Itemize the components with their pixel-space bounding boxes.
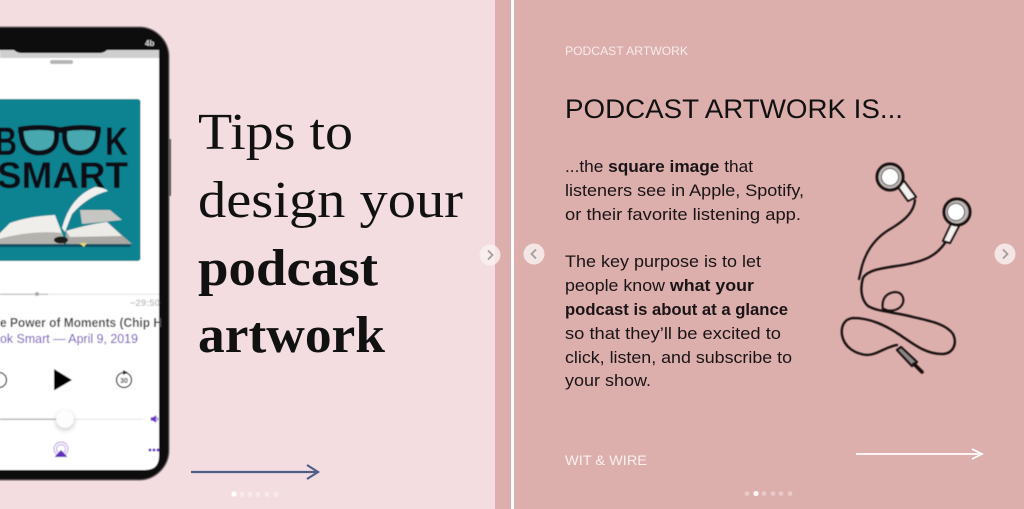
earphone left wire xyxy=(859,200,915,279)
remaining time: −29:50 xyxy=(130,298,160,309)
progress bar xyxy=(0,292,159,296)
cover glasses xyxy=(18,127,101,153)
heading: tips to design your podcast artwork xyxy=(198,104,463,364)
heading: tips to design your podcast artwork: artwork xyxy=(198,307,385,364)
body text: podcast is about at a glance xyxy=(565,301,788,319)
body text: or their favorite listening app. xyxy=(565,206,801,224)
nav button: previous right slide xyxy=(524,244,544,264)
episode subtitle: ok Smart — April 9, 2019 xyxy=(0,331,138,346)
icon: speaker xyxy=(151,416,158,422)
screen top grey bar xyxy=(0,50,159,58)
heading: tips to design your podcast artwork: Tips to xyxy=(198,104,353,161)
cover background xyxy=(0,99,140,261)
heading: tips to design your podcast artwork: podcast xyxy=(198,240,379,297)
body text: click, listen, and subscribe to xyxy=(565,349,792,367)
audio jack xyxy=(897,347,922,372)
panel: left slide xyxy=(0,0,495,509)
cover open book xyxy=(0,187,132,247)
icon: more dots xyxy=(148,448,160,452)
earphone main wire xyxy=(842,243,955,355)
eyebrow label: PODCAST ARTWORK xyxy=(565,44,688,58)
phone mockup xyxy=(0,27,171,480)
icon: skip forward 30: 30 xyxy=(120,378,128,385)
panel: right slide xyxy=(514,0,1024,509)
icon: airplay xyxy=(54,442,68,457)
body text: people know what your xyxy=(565,277,755,295)
phone notch xyxy=(11,45,110,53)
cover word BOOK xyxy=(0,120,128,164)
arrow: right slide xyxy=(856,449,982,459)
body text: listeners see in Apple, Spotify, xyxy=(565,182,804,200)
body text xyxy=(565,158,804,390)
phone screen xyxy=(0,50,159,470)
nav button: next right slide xyxy=(994,244,1016,264)
pagination dots: right slide xyxy=(745,491,792,496)
footer brand: WIT & WIRE xyxy=(565,452,647,468)
podcast cover art xyxy=(0,99,140,261)
nav button: next left slide xyxy=(480,244,500,266)
body text: your show. xyxy=(565,372,651,390)
body text: The key purpose is to let xyxy=(565,253,761,271)
icon: skip forward 30 xyxy=(116,370,132,388)
earphone wire loop xyxy=(883,292,903,311)
arrow: left slide xyxy=(191,465,318,479)
pagination dots: left slide xyxy=(231,491,278,497)
episode title: e Power of Moments (Chip H xyxy=(0,315,162,330)
cover word SMART: SMART xyxy=(0,155,128,196)
status text: 4b xyxy=(145,39,154,48)
earbud left xyxy=(877,164,916,201)
icon: skip back xyxy=(0,372,6,388)
phone side button xyxy=(168,139,171,196)
icon: play xyxy=(54,369,72,390)
panel: slide gap strip xyxy=(495,0,511,509)
divider gap xyxy=(511,0,514,509)
heading: podcast artwork is: PODCAST ARTWORK IS... xyxy=(565,94,903,124)
volume slider xyxy=(0,410,143,430)
body text: ...the square image that xyxy=(565,158,753,176)
heading: tips to design your podcast artwork: design your xyxy=(198,172,463,229)
cover word BOOK: K xyxy=(105,120,128,164)
sheet handle xyxy=(50,60,73,64)
illustration: earphones xyxy=(842,164,970,372)
phone body xyxy=(0,27,169,480)
body text: so that they’ll be excited to xyxy=(565,325,781,343)
earbud right xyxy=(943,199,970,243)
